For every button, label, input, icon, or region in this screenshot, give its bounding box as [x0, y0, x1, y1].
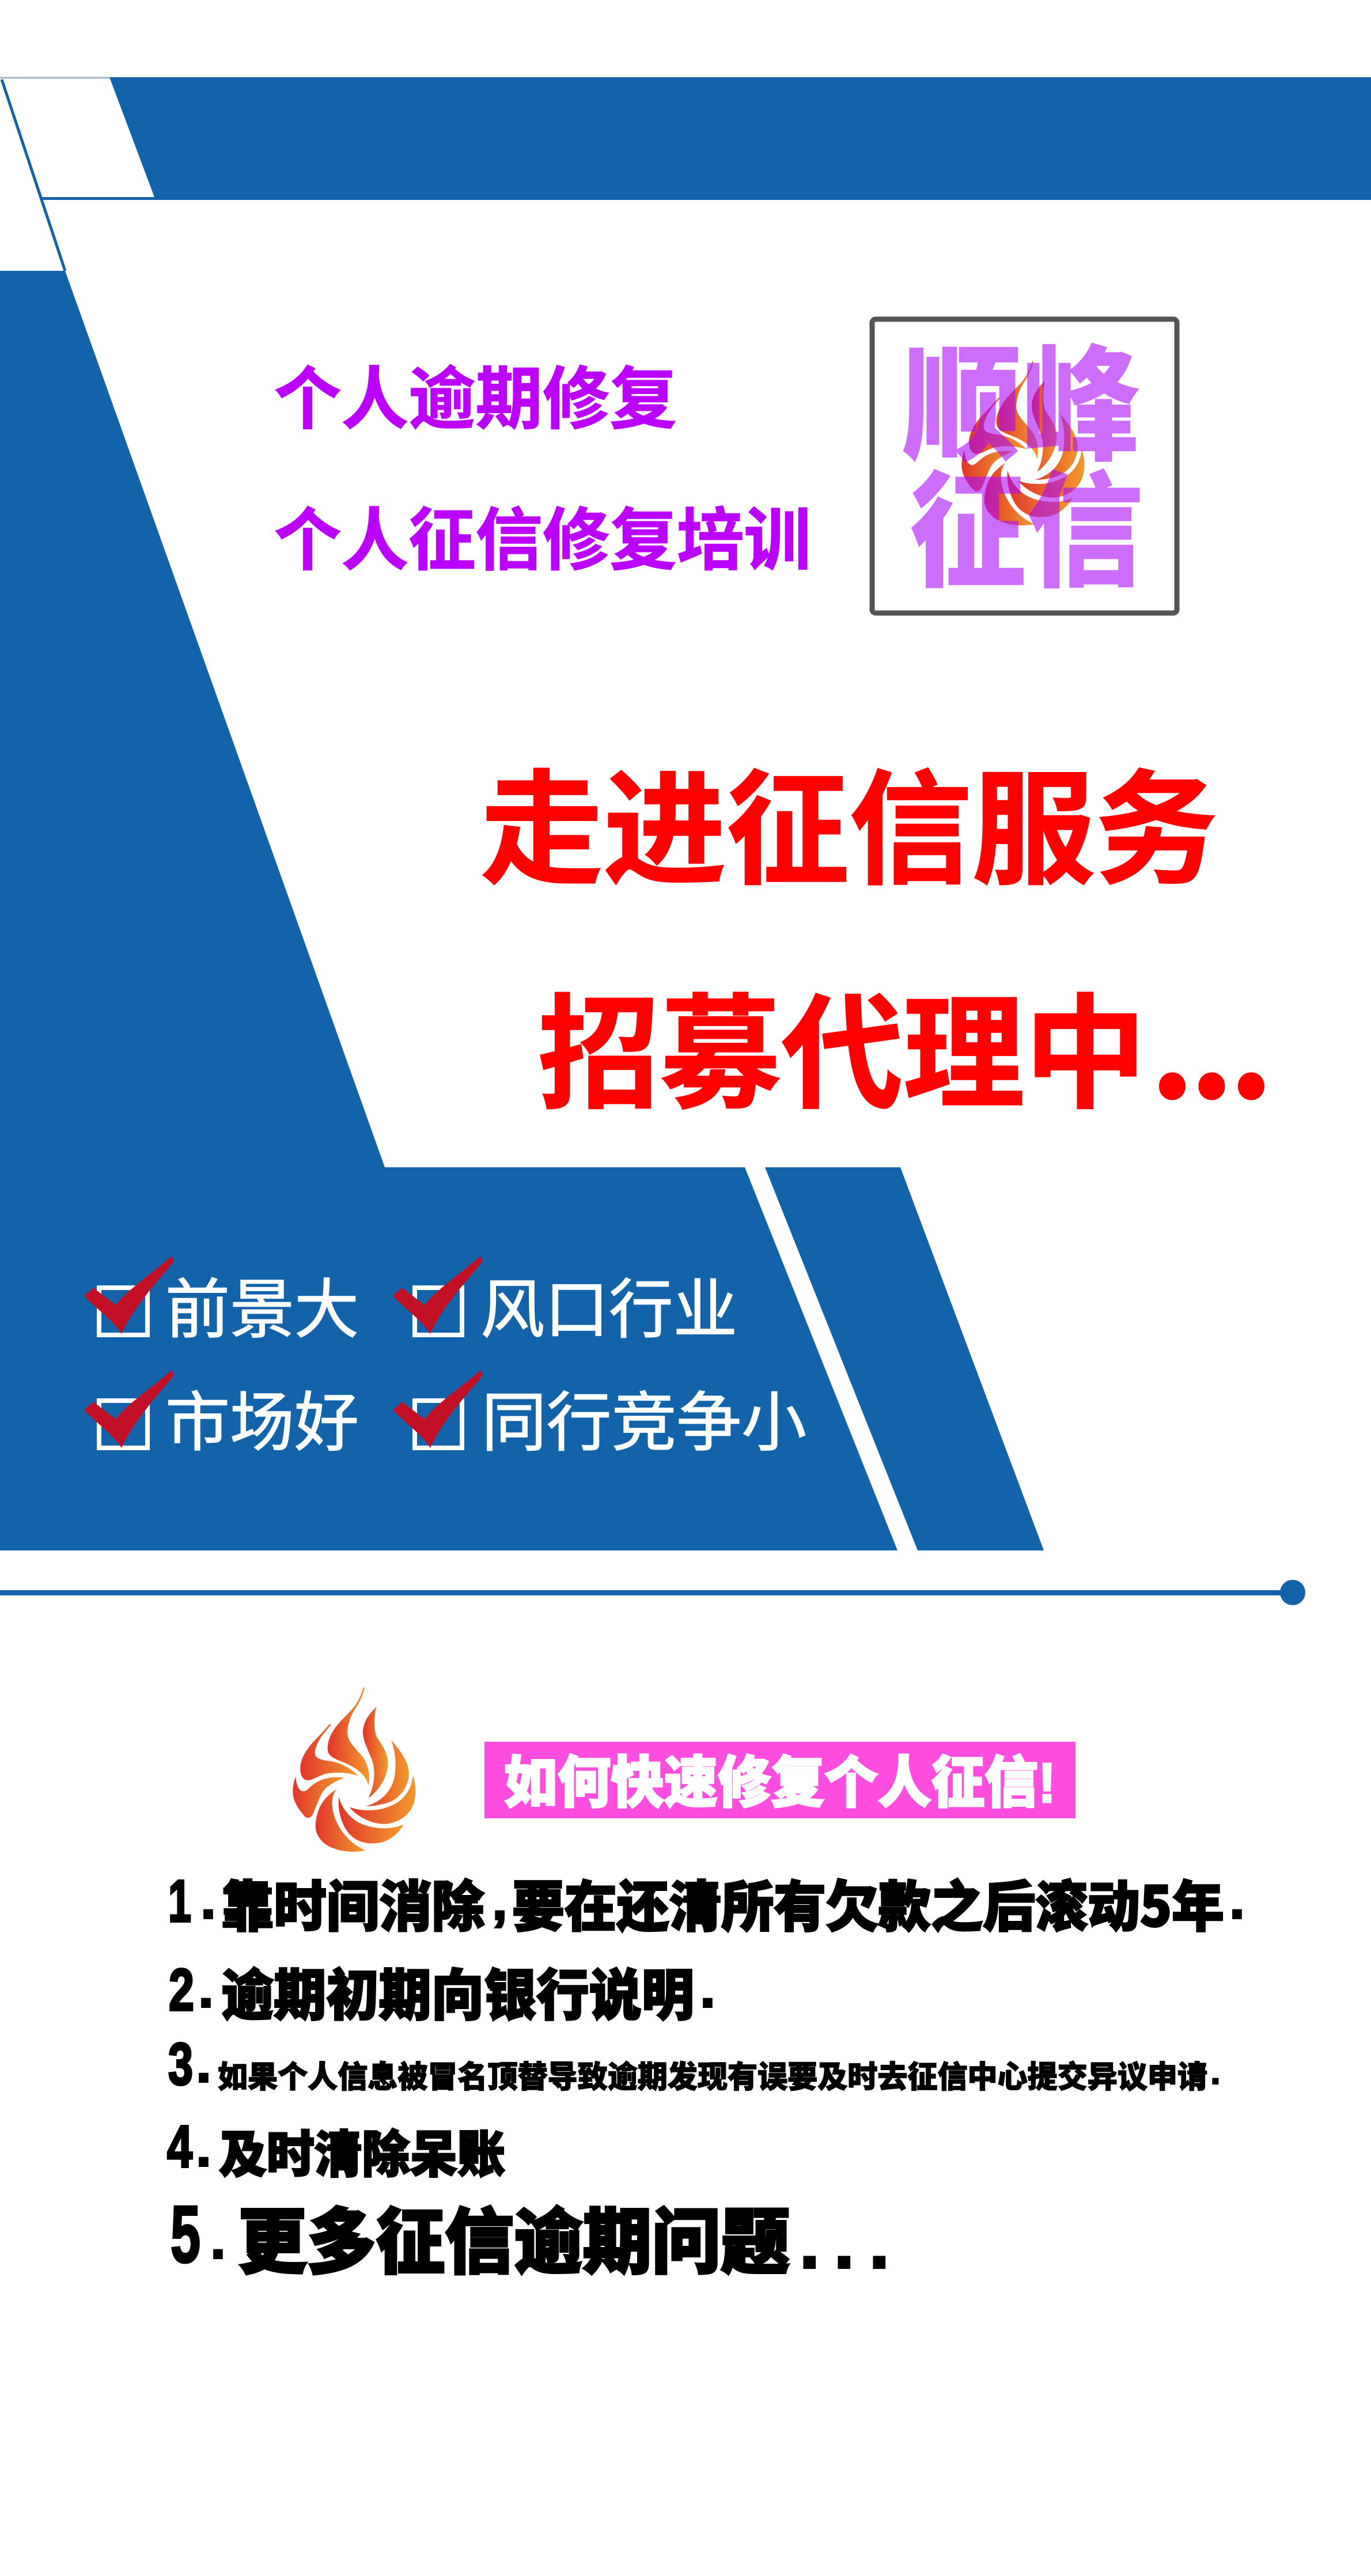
- logo text: 顺峰: [903, 337, 1141, 477]
- check item: 风口行业: 风口行业: [480, 1274, 737, 1346]
- tip 1: .: [1230, 1872, 1244, 1930]
- check item: 前景大: 前景大: [165, 1274, 359, 1346]
- check item: 风口行业: [393, 1256, 737, 1346]
- service line: credit repair training: 个人征信修复培训: [274, 503, 811, 579]
- check item: 前景大: [84, 1256, 359, 1346]
- tip 1: 要在还清所有欠款之后滚动5年: [512, 1863, 1224, 1942]
- tip 2: 逾期初期向银行说明: [221, 1951, 694, 2031]
- headline line one: 走进征信服务: [480, 761, 1218, 900]
- tip 1: 1: [168, 1868, 191, 1934]
- headline line two: 招募代理中: [538, 985, 1146, 1124]
- red headline: [480, 761, 1274, 1138]
- service line: overdue repair: 个人逾期修复: [274, 362, 677, 438]
- tip 5: .: [211, 2212, 225, 2269]
- blue left and lower panel: [0, 271, 1044, 1550]
- tip 1: [168, 1863, 1244, 1942]
- tip 4: .: [196, 2120, 211, 2177]
- tip 3: [168, 2031, 1219, 2097]
- pink banner: 如何快速修复个人征信!: [504, 1752, 1056, 1814]
- top blue band: [0, 77, 1371, 271]
- divider with dot: [0, 1580, 1305, 1605]
- tip 5: 更多征信逾期问题: [238, 2184, 790, 2288]
- tip 4: 及时清除呆账: [219, 2114, 505, 2187]
- tips list: [167, 1863, 1244, 2288]
- purple service lines: [274, 362, 811, 579]
- logo text: [903, 337, 1143, 603]
- tip 3: 3: [168, 2031, 193, 2097]
- checklist: [84, 1256, 806, 1459]
- tip 1: 靠时间消除: [221, 1863, 484, 1942]
- tip 3: .: [196, 2036, 211, 2093]
- tip 3: .: [1211, 2057, 1219, 2090]
- tip 2: .: [700, 1961, 715, 2018]
- check item: 市场好: 市场好: [165, 1387, 359, 1459]
- icon: flame logo: [293, 1687, 415, 1852]
- tip 1: .: [201, 1872, 215, 1930]
- tip 2: 2: [169, 1957, 194, 2023]
- tip 2: .: [199, 1961, 213, 2018]
- check item: 同行竞争小: [393, 1370, 806, 1459]
- check item: 市场好: [84, 1370, 359, 1459]
- tip 5: 5: [171, 2189, 200, 2279]
- logo text: 征信: [909, 463, 1143, 603]
- tip 1: ,: [493, 1873, 507, 1931]
- tip 4: 4: [167, 2113, 192, 2180]
- headline ellipsis: ...: [1150, 938, 1274, 1138]
- brand logo box: [872, 319, 1177, 613]
- icon: flame in logo box: [961, 361, 1084, 525]
- tip 5: ...: [800, 2203, 889, 2283]
- tip 3: 如果个人信息被冒名顶替导致逾期发现有误要及时去征信中心提交异议申请: [218, 2053, 1207, 2097]
- check item: 同行竞争小: 同行竞争小: [482, 1387, 806, 1459]
